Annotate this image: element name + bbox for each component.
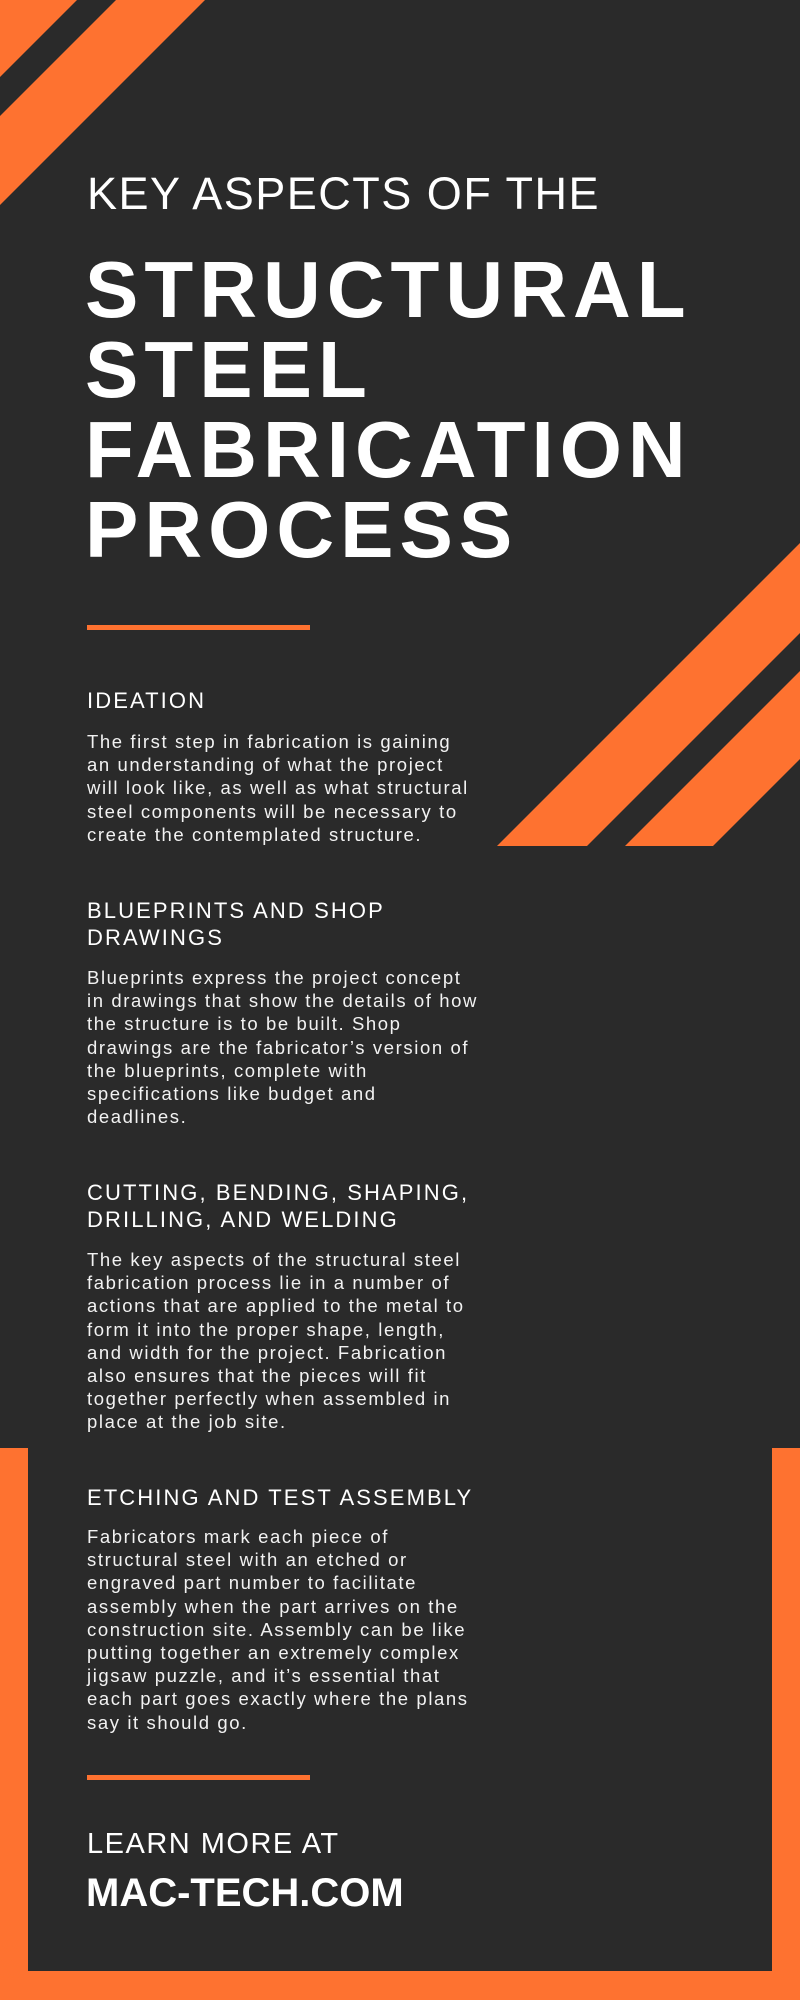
text: blueprints [87, 967, 478, 1127]
heading: blueprints [87, 898, 385, 950]
text: etching: say it should go. [87, 1712, 248, 1733]
text: cutting [87, 1249, 465, 1432]
heading: ideation: IDEATION [87, 688, 206, 713]
text: blueprints: deadlines. [87, 1106, 187, 1127]
text: blueprints: Blueprints express the project concept [87, 967, 461, 988]
text: ideation [87, 731, 469, 845]
heading: blueprints: BLUEPRINTS AND SHOP [87, 898, 385, 923]
text: etching: assembly when the part arrives on the [87, 1596, 459, 1617]
text: etching: Fabricators mark each piece of [87, 1526, 389, 1547]
text: ideation: create the contemplated structure. [87, 824, 422, 845]
text: cutting: fabrication process lie in a number of [87, 1272, 450, 1293]
footer: learn more: LEARN MORE AT [87, 1828, 340, 1860]
divider: bottom orange rule [87, 1775, 310, 1780]
text: etching: construction site. Assembly can be like [87, 1619, 466, 1640]
text: blueprints: specifications like budget and [87, 1083, 377, 1104]
text: cutting: and width for the project. Fabrication [87, 1342, 447, 1363]
title: main: FABRICATION [85, 405, 692, 494]
title: main: STRUCTURAL [85, 245, 692, 334]
text: ideation: will look like, as well as what structural [87, 777, 469, 798]
text: cutting: also ensures that the pieces will fit [87, 1365, 427, 1386]
text: cutting: The key aspects of the structural steel [87, 1249, 461, 1270]
heading: cutting [87, 1180, 469, 1232]
text: cutting: actions that are applied to the metal to [87, 1295, 465, 1316]
text: etching: jigsaw puzzle, and it’s essential that [87, 1665, 441, 1686]
text: ideation: steel components will be necessary to [87, 801, 458, 822]
text: cutting: together perfectly when assembled in [87, 1388, 451, 1409]
text: ideation: The first step in fabrication is gaining [87, 731, 451, 752]
heading: blueprints: DRAWINGS [87, 925, 224, 950]
title: main [85, 245, 692, 574]
text: blueprints: in drawings that show the details of how [87, 990, 478, 1011]
text: etching: engraved part number to facilitate [87, 1572, 417, 1593]
text: etching [86, 1526, 469, 1733]
text: blueprints: drawings are the fabricator’s version of [87, 1037, 469, 1058]
text: cutting: place at the job site. [87, 1411, 287, 1432]
heading: etching: ETCHING AND TEST ASSEMBLY [87, 1485, 473, 1510]
title: main: PROCESS [85, 485, 518, 574]
title: subtitle line: KEY ASPECTS OF THE [87, 168, 600, 219]
heading: cutting: DRILLING, AND WELDING [87, 1207, 399, 1232]
footer: website: MAC-TECH.COM [86, 1871, 404, 1915]
text: blueprints: the structure is to be built. Shop [87, 1013, 402, 1034]
text: cutting: form it into the proper shape, length, [87, 1319, 445, 1340]
text: etching: structural steel with an etched or [87, 1549, 408, 1570]
title: main: STEEL [85, 325, 373, 414]
text: blueprints: the blueprints, complete with [87, 1060, 368, 1081]
divider: top orange rule [87, 625, 310, 630]
text: etching: each part goes exactly where the plans [87, 1688, 469, 1709]
heading: cutting: CUTTING, BENDING, SHAPING, [87, 1180, 469, 1205]
text: ideation: an understanding of what the project [87, 754, 444, 775]
text: etching: putting together an extremely complex [87, 1642, 460, 1663]
